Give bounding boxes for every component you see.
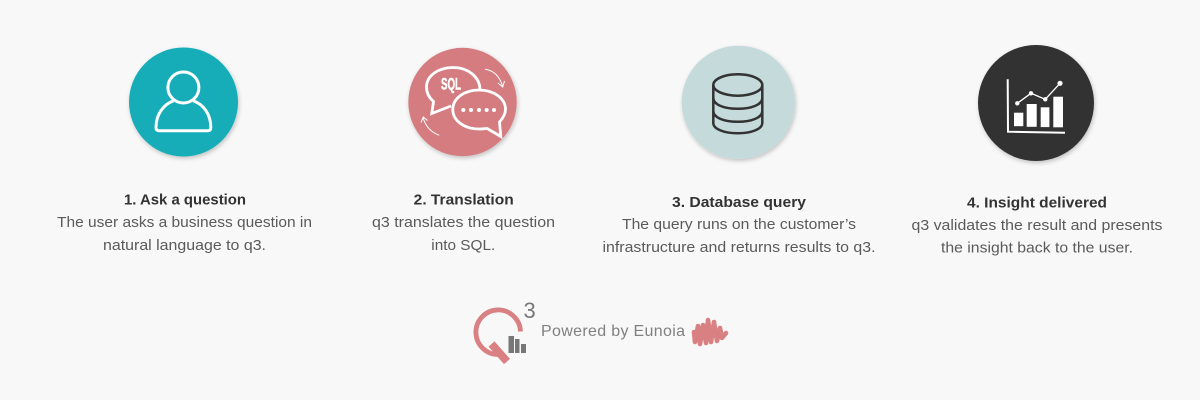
heading: step 4: 4. Insight delivered (967, 194, 1107, 212)
heading: step 3: 3. Database query (672, 194, 807, 211)
footer: q3 logo and powered by Eunoia (476, 298, 726, 362)
heading: step 2: 2. Translation (414, 192, 514, 208)
icon: chart in dark circle (978, 45, 1094, 161)
text: step 2 description: into SQL. (431, 237, 495, 254)
text: step 4 description: the insight back to the user. (941, 240, 1133, 256)
text: step 1 description (57, 214, 312, 254)
text: step 2 description: q3 translates the question (372, 214, 555, 231)
text: powered by Eunoia: Powered by Eunoia (541, 323, 685, 340)
panel: step 1 ask a question (57, 48, 312, 254)
text: step 3 description: The query runs on the customer’s (622, 216, 856, 233)
text: step 4 description: q3 validates the result and presents (912, 217, 1162, 234)
text: step 4 description (912, 217, 1162, 256)
icon: database in pale blue circle (682, 46, 795, 159)
panel: step 3 database query (602, 46, 876, 256)
heading: step 1: 1. Ask a question (124, 192, 246, 208)
text: step 3 description: infrastructure and returns results to q3. (602, 239, 876, 256)
panel: step 4 insight delivered (912, 45, 1162, 256)
icon: q3 logo: 3 (524, 298, 536, 323)
icon: Eunoia scribble (694, 320, 726, 344)
icon: user in teal circle (129, 48, 238, 156)
text: step 3 description (602, 216, 876, 256)
icon: SQL speech bubbles in rose circle: SQL (441, 74, 461, 94)
text: step 1 description: The user asks a business question in (57, 214, 312, 231)
panel: step 2 translation (372, 48, 555, 254)
icon: SQL speech bubbles in rose circle (408, 48, 517, 156)
text: step 1 description: natural language to q3. (103, 237, 266, 254)
icon: q3 logo (476, 298, 536, 362)
text: step 2 description (372, 214, 555, 254)
